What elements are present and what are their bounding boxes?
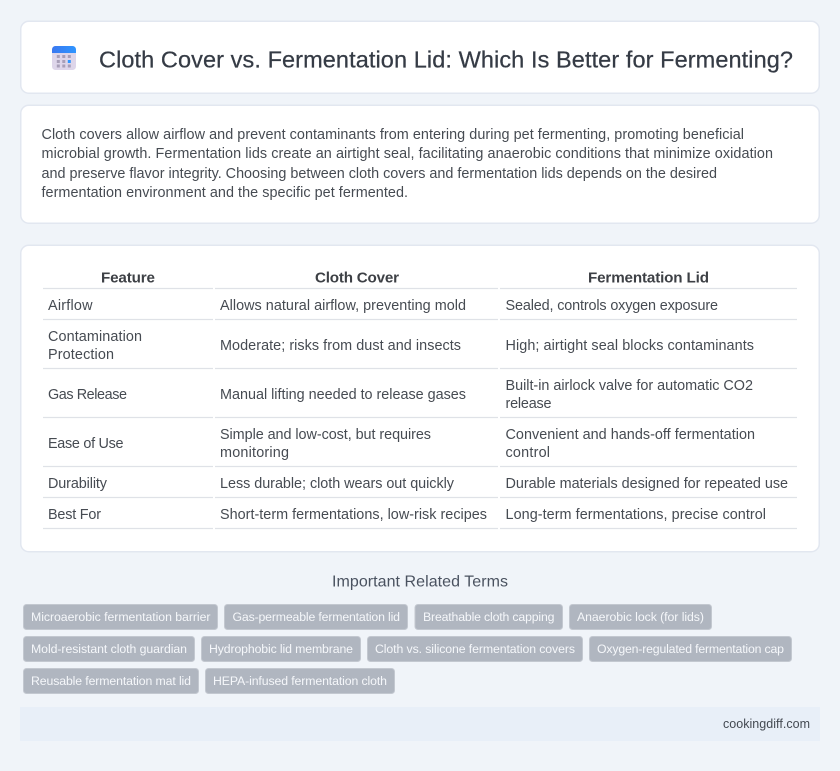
row: ease of use: control (506, 445, 550, 461)
tag (590, 636, 792, 662)
row: gas release: Manual lifting needed to release gases (220, 387, 466, 403)
row: gas release: Built-in airlock valve for automatic CO2 (506, 378, 753, 394)
tag (24, 668, 198, 694)
row: best for: Short-term fermentations, low-risk recipes (220, 507, 487, 523)
tag (224, 604, 408, 630)
table header (101, 270, 709, 286)
tag: Gas-permeable fermentation lid (232, 610, 400, 624)
panel: comparison table (21, 245, 819, 552)
tag: Reusable fermentation mat lid (31, 674, 191, 688)
row: best for: Best For (48, 507, 101, 523)
intro text: microbial growth. Fermentation lids create an airtight seal, facilitating anaerobic conditions that minimize oxidation (42, 146, 773, 162)
tag (24, 636, 194, 662)
tag: Cloth vs. silicone fermentation covers (375, 642, 575, 656)
row: ease of use: monitoring (220, 445, 289, 461)
row: gas release (48, 378, 753, 412)
row: airflow: Sealed, controls oxygen exposure (506, 298, 718, 314)
row: gas release: Gas Release (48, 387, 127, 403)
row: durability (48, 476, 788, 492)
intro text: fermentation environment and the specific pet fermented. (42, 185, 408, 201)
tag (24, 604, 218, 630)
table header: Cloth Cover (315, 270, 399, 286)
tag: Breathable cloth capping (423, 610, 555, 624)
row: durability: Less durable; cloth wears out quickly (220, 476, 455, 492)
intro text: Cloth covers allow airflow and prevent contaminants from entering during pet fermenting, promoting beneficial (42, 127, 744, 143)
panel: title card (21, 21, 819, 93)
related terms tags (24, 604, 792, 694)
footer source: cookingdiff.com (723, 717, 810, 731)
table header: Feature (101, 270, 155, 286)
tag (202, 636, 360, 662)
table header: Fermentation Lid (588, 270, 709, 286)
row: ease of use: Ease of Use (48, 436, 124, 452)
row: contamination protection (48, 329, 754, 363)
row: best for: Long-term fermentations, precise control (506, 507, 766, 523)
row: airflow: Allows natural airflow, preventing mold (220, 298, 466, 314)
tag: HEPA-infused fermentation cloth (213, 674, 387, 688)
icon: calendar (52, 46, 76, 70)
row: contamination protection: Contamination (48, 329, 142, 345)
row: ease of use: Simple and low-cost, but requires (220, 427, 431, 443)
footer (20, 707, 820, 741)
intro text: and preserve flavor integrity. Choosing between cloth covers and fermentation lids depends on the desired (42, 166, 717, 182)
row: contamination protection: Moderate; risks from dust and insects (220, 338, 461, 354)
tag: Oxygen-regulated fermentation cap (597, 642, 784, 656)
row: contamination protection: High; airtight seal blocks contaminants (506, 338, 754, 354)
row: gas release: release (506, 396, 552, 412)
row: airflow: Airflow (48, 298, 93, 314)
tag (415, 604, 562, 630)
title: Cloth Cover vs. Fermentation Lid: Which Is Better for Fermenting? (99, 46, 793, 72)
tag: Mold-resistant cloth guardian (31, 642, 187, 656)
row: airflow (48, 298, 718, 314)
heading: related terms: Important Related Terms (332, 574, 508, 590)
row: ease of use: Convenient and hands-off fermentation (506, 427, 755, 443)
tag: Anaerobic lock (for lids) (577, 610, 704, 624)
row: best for (48, 507, 766, 523)
tag (368, 636, 582, 662)
row: durability: Durability (48, 476, 108, 492)
row: durability: Durable materials designed for repeated use (506, 476, 788, 492)
panel: introduction (21, 105, 819, 223)
tag (570, 604, 712, 630)
row: ease of use (48, 427, 755, 461)
tag (206, 668, 394, 694)
intro text (42, 127, 773, 201)
tag: Microaerobic fermentation barrier (31, 610, 210, 624)
tag: Hydrophobic lid membrane (209, 642, 353, 656)
row: contamination protection: Protection (48, 347, 114, 363)
